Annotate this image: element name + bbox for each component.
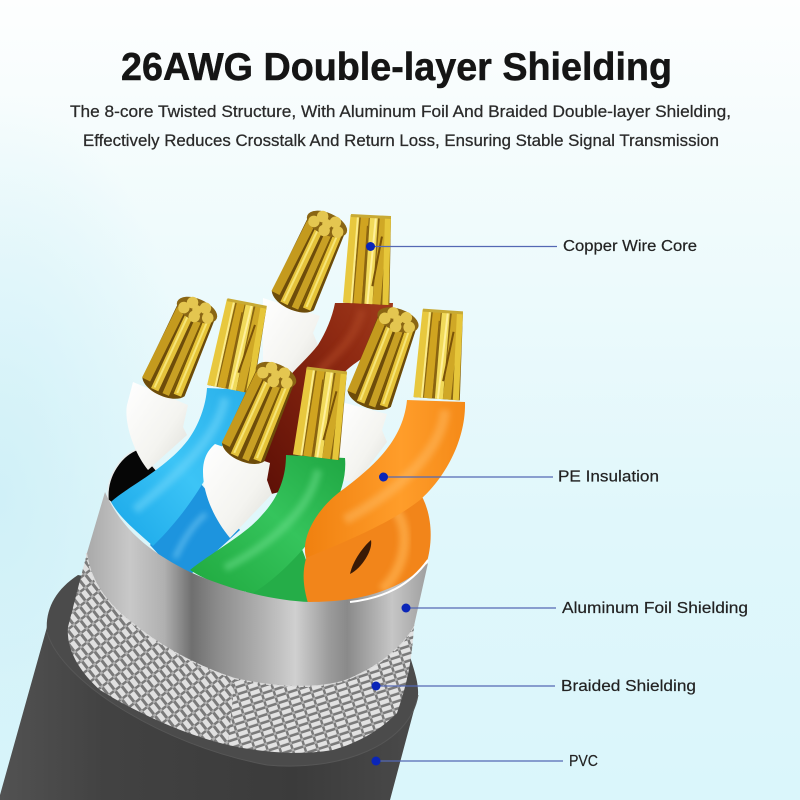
core: blue copper bbox=[208, 298, 270, 394]
core: front copper bbox=[218, 356, 301, 470]
callout: PVC bbox=[372, 753, 598, 770]
core: green copper bbox=[293, 366, 350, 460]
orange wire bbox=[305, 400, 465, 558]
subtitle text bbox=[70, 103, 731, 150]
aluminum foil shielding bbox=[87, 492, 428, 686]
green wire bbox=[190, 455, 345, 593]
subtitle text: The 8-core Twisted Structure, With Aluminum Foil And Braided Double-layer Shielding, bbox=[70, 103, 731, 121]
braided shielding bbox=[68, 553, 414, 753]
red wire bbox=[262, 303, 393, 495]
core: left copper bbox=[139, 291, 222, 404]
core: red copper bbox=[343, 214, 394, 305]
lower twisted wires bbox=[150, 478, 431, 606]
PVC jacket bbox=[0, 575, 418, 800]
blue wire bbox=[111, 388, 247, 546]
right white wire bbox=[338, 403, 387, 482]
cable illustration bbox=[0, 205, 466, 800]
core: top left copper bbox=[268, 205, 352, 318]
callout: copper wire core: Copper Wire Core bbox=[563, 238, 697, 255]
core: right copper bbox=[345, 302, 423, 415]
back white wires bbox=[126, 298, 320, 470]
subtitle text: Effectively Reduces Crosstalk And Return Loss, Ensuring Stable Signal Transmission bbox=[83, 132, 719, 150]
callout: copper wire core bbox=[366, 238, 697, 255]
callout: PE insulation bbox=[379, 468, 659, 486]
callout: braided shielding bbox=[372, 678, 696, 695]
front white wire bbox=[203, 444, 272, 538]
callout: aluminum foil shielding: Aluminum Foil Shielding bbox=[562, 600, 748, 617]
inner back wall of foil bbox=[108, 449, 158, 515]
callout: braided shielding: Braided Shielding bbox=[561, 678, 696, 695]
core: orange copper bbox=[414, 308, 466, 400]
callout: PVC: PVC bbox=[569, 753, 598, 770]
title: 26AWG Double-layer Shielding bbox=[121, 46, 672, 89]
callout: aluminum foil shielding bbox=[402, 600, 748, 617]
callout: PE insulation: PE Insulation bbox=[558, 468, 659, 486]
